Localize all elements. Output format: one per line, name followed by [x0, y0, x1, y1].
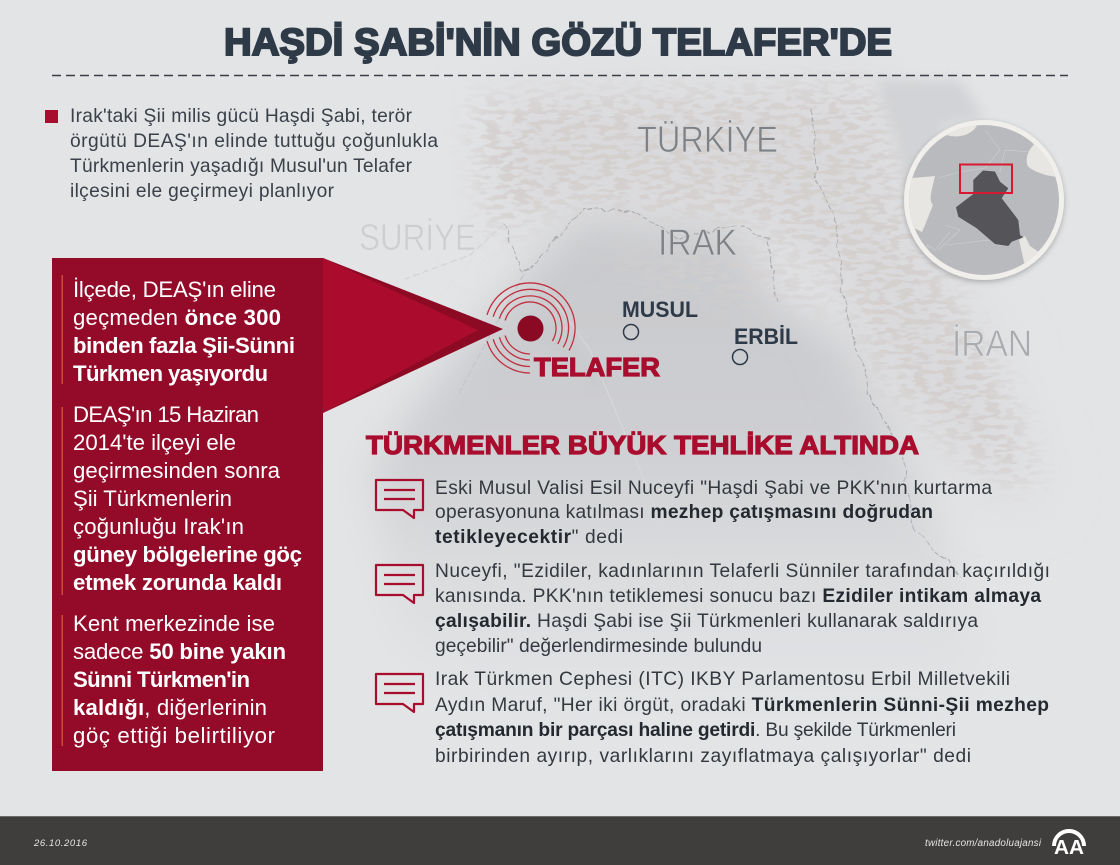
quote 3: [376, 669, 1049, 767]
text block: after capture: çoğunluğu Irak'ın: [73, 514, 244, 539]
title: HAŞDİ ŞABİ'NİN GÖZÜ TELAFER'DE: [224, 21, 892, 64]
map country labels: [359, 119, 1032, 364]
label: Suriye: SURİYE: [359, 217, 476, 258]
quote text: tetikleyecektir" dedi: [435, 527, 623, 548]
quote text: [435, 478, 992, 548]
quote text: Aydın Maruf, "Her iki örgüt, oradaki Türkmenlerin Sünni-Şii mezhep: [435, 695, 1049, 716]
footer bar: [0, 816, 1120, 865]
quote text: geçebilir" değerlendirmesinde bulundu: [435, 636, 762, 657]
section heading: TÜRKMENLER BÜYÜK TEHLİKE ALTINDA: [366, 430, 919, 460]
city: Musul: [622, 297, 698, 340]
panel: red info panel: [52, 258, 503, 771]
intro paragraph: Irak'taki Şii milis gücü Haşdi Şabi, terör: [70, 106, 413, 127]
icon: Anadolu Agency logo: AA: [1054, 837, 1084, 859]
quote text: çalışabilir. Haşdi Şabi ise Şii Türkmenleri kullanarak saldırıya: [435, 611, 978, 632]
quote text: Irak Türkmen Cephesi (ITC) IKBY Parlamentosu Erbil Milletvekili: [435, 669, 1010, 690]
quote 1: [376, 478, 992, 548]
pointer arrow to Telafer: [323, 258, 503, 413]
label: Telafer: TELAFER: [534, 352, 660, 382]
text block: after capture: etmek zorunda kaldı: [73, 570, 282, 595]
inset circle frame: [904, 120, 1064, 280]
label: Iran: İRAN: [952, 323, 1032, 364]
icon: signal rings: [487, 283, 575, 373]
text block: before DEAŞ: İlçede, DEAŞ'ın eline: [73, 277, 276, 302]
inset: red focus rectangle: [960, 164, 1012, 193]
text block: before DEAŞ: Türkmen yaşıyordu: [73, 361, 268, 386]
text block: before DEAŞ: geçmeden önce 300: [73, 305, 281, 330]
text block: city centre: Sünni Türkmen'in: [73, 667, 250, 692]
text block: city centre: Kent merkezinde ise: [73, 611, 275, 636]
intro text block: [45, 106, 438, 202]
quote text: [435, 669, 1049, 767]
social handle: twitter.com/anadoluajansi: [925, 838, 1042, 849]
inset: border lines: [926, 130, 1030, 250]
text block: after capture: Şii Türkmenlerin: [73, 486, 232, 511]
text block: after capture: DEAŞ'ın 15 Haziran: [73, 402, 259, 427]
inset: Iraq shape: [956, 170, 1023, 246]
icon: red bullet: [45, 110, 58, 123]
text block: after capture: güney bölgelerine göç: [73, 542, 302, 567]
text block: city centre: [73, 611, 286, 748]
quote text: Nuceyfi, "Ezidiler, kadınlarının Telaferli Sünniler tarafından kaçırıldığı: [435, 561, 1050, 582]
text block: before DEAŞ: [73, 277, 295, 386]
text block: before DEAŞ: binden fazla Şii-Sünni: [73, 333, 295, 358]
quote text: kanısında. PKK'nın tetiklemesi sonucu bazı Ezidiler intikam almaya: [435, 586, 1041, 607]
intro paragraph: ilçesini ele geçirmeyi planlıyor: [70, 181, 335, 202]
label: Irak: IRAK: [658, 222, 737, 263]
text block: after capture: [73, 402, 302, 595]
city: Erbil: ERBİL: [734, 324, 798, 349]
intro paragraph: Türkmenlerin yaşadığı Musul'un Telafer: [70, 156, 413, 177]
intro paragraph: [70, 106, 438, 202]
quote text: birbirinden ayırıp, varlıklarını zayıflatmaya çalışıyorlar" dedi: [435, 746, 971, 767]
marker dot: [518, 316, 544, 342]
inset: surrounding seas: [909, 126, 1055, 263]
accent line 2: [62, 407, 63, 595]
panel background: [52, 258, 323, 771]
text block: city centre: kaldığı, diğerlerinin: [73, 695, 267, 720]
text block: after capture: 2014'te ilçeyi ele: [73, 430, 236, 455]
text block: after capture: geçirmesinden sonra: [73, 458, 281, 483]
intro paragraph: örgütü DEAŞ'ın elinde tuttuğu çoğunlukla: [70, 131, 438, 152]
icon: speech bubble: [376, 480, 423, 518]
quote 2: [376, 561, 1050, 657]
date: 26.10.2016: [33, 838, 88, 849]
inset locator map: [904, 120, 1064, 280]
icon: speech bubble: [376, 565, 423, 603]
city: Musul: MUSUL: [622, 297, 698, 322]
quote text: operasyonuna katılması mezhep çatışmasını doğrudan: [435, 502, 933, 523]
accent line 1: [62, 275, 63, 384]
Telafer marker: [487, 283, 660, 382]
title divider: [52, 74, 1068, 76]
relief map background: [370, 80, 1040, 790]
accent line 3: [62, 615, 63, 746]
quote text: Eski Musul Valisi Esil Nuceyfi "Haşdi Şabi ve PKK'nın kurtarma: [435, 478, 992, 499]
text block: city centre: sadece 50 bine yakın: [73, 639, 286, 664]
quote text: çatışmanın bir parçası haline getirdi. Bu şekilde Türkmenleri: [435, 720, 956, 741]
city: Erbil: [732, 324, 798, 364]
text block: city centre: göç ettiği belirtiliyor: [73, 723, 276, 748]
icon: speech bubble: [376, 674, 423, 712]
label: Türkiye: TÜRKİYE: [637, 119, 778, 160]
quote text: [435, 561, 1050, 657]
